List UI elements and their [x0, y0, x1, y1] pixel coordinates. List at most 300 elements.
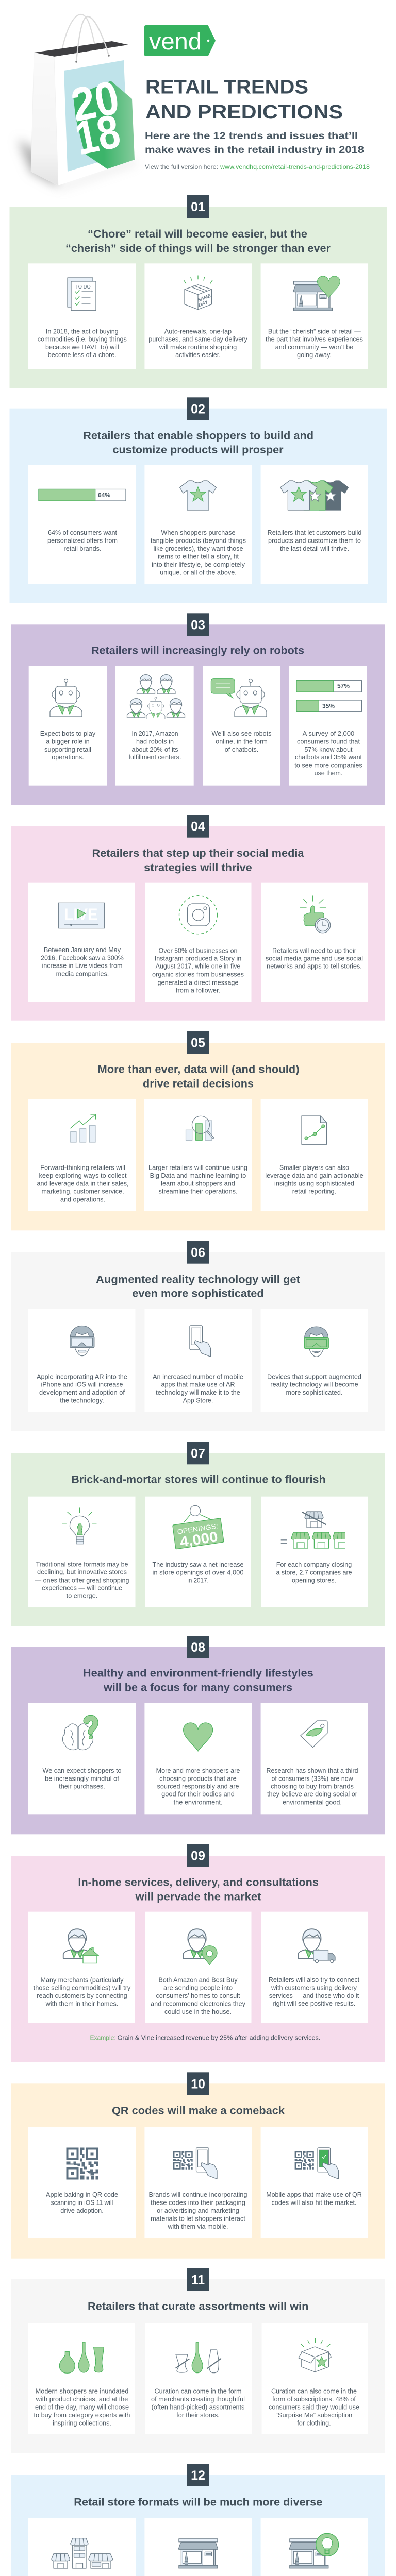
- icon: QR code with phone: [173, 2148, 217, 2179]
- text: apple QR: Apple baking in QR code: [46, 2191, 118, 2198]
- text: apple AR: development and adoption of: [39, 1389, 125, 1396]
- text: delivery: with customers using delivery: [271, 1985, 357, 1992]
- text: instagram: from a follower.: [176, 987, 220, 994]
- text: hand-picked: (often hand-picked) assortments: [152, 2403, 244, 2411]
- badge 05: [187, 1031, 209, 1054]
- text: survey: A survey of 2,000: [303, 730, 354, 737]
- icon: robot: [50, 679, 82, 717]
- text: reporting: leverage data and gain actionable: [265, 1172, 364, 1179]
- icon: live video: LIVE: [64, 905, 98, 924]
- text: mobile apps: App Store.: [183, 1397, 213, 1404]
- heading 05: [98, 1063, 299, 1090]
- section 08: [11, 1636, 385, 1834]
- text: consultations: Both Amazon and Best Buy: [159, 1977, 238, 1984]
- text: research: [266, 1767, 358, 1806]
- example: grain and vine: Example:: [90, 2034, 116, 2041]
- text: forward-thinking: and operations.: [60, 1196, 105, 1203]
- card: customize: [261, 465, 368, 584]
- card: instagram: [145, 883, 252, 1002]
- text: big data: learn about shoppers and: [161, 1180, 235, 1187]
- title: RETAIL TRENDS: [145, 76, 308, 98]
- text: cherish: going away.: [297, 351, 332, 359]
- text: amazon: had robots in: [136, 738, 174, 745]
- example: grain and vine: Grain & Vine increased revenue by 25% after adding delivery services.: [118, 2034, 320, 2041]
- text: big data: Larger retailers will continue using: [148, 1164, 248, 1171]
- text: openings: in 2017.: [187, 1577, 209, 1584]
- icon: magnified bar chart: [186, 1116, 213, 1140]
- text: facebook live: Between January and May: [44, 946, 121, 954]
- shopping bag illustration: 20: [67, 71, 123, 132]
- panel 08 background: [11, 1647, 385, 1834]
- text: brands QR: [148, 2191, 248, 2230]
- card: subscriptions: [262, 2323, 368, 2434]
- text: facebook live: 2016, Facebook saw a 300%: [41, 954, 124, 961]
- text: reporting: insights using sophisticated: [274, 1180, 354, 1187]
- card: same day: [144, 263, 252, 369]
- text: brands QR: or advertising and marketing: [157, 2207, 239, 2214]
- heading 11: Retailers that curate assortments will win: [88, 2300, 308, 2313]
- badge 05: 05: [191, 1036, 205, 1050]
- shopping bag illustration: [18, 14, 136, 189]
- text: bots: Expect bots to play: [40, 730, 96, 737]
- panel 12 background: [11, 2475, 385, 2576]
- text: reporting: retail reporting.: [292, 1188, 336, 1195]
- card: devices: [261, 1309, 368, 1412]
- text: hand-picked: Curation can come in the form: [155, 2388, 241, 2395]
- text: research: of consumers (33%) are now: [271, 1775, 353, 1782]
- panel 07 background: [11, 1453, 385, 1626]
- text: same day: purchases, and same-day delivery: [148, 336, 248, 343]
- icon: storefront: [178, 2539, 218, 2568]
- text: devices: reality technology will become: [270, 1381, 358, 1388]
- icon: instagram story: [179, 896, 218, 934]
- icon: three t-shirts: [280, 481, 349, 510]
- icon: three store buildings: [52, 2538, 112, 2568]
- text: to-do: because we HAVE to) will: [45, 344, 119, 351]
- text: instagram: [152, 947, 244, 994]
- text: cherish: [266, 328, 363, 359]
- text: forward-thinking: keep exploring ways to collect: [39, 1172, 127, 1179]
- badge 11: 11: [191, 2273, 205, 2287]
- text: research: choosing to buy from brands: [271, 1783, 354, 1790]
- text: devices: more sophisticated.: [286, 1389, 342, 1396]
- text: bots: operations.: [52, 754, 84, 761]
- card: social game: [261, 883, 368, 1002]
- heading 05: drive retail decisions: [143, 1077, 254, 1090]
- icon: chatbot with speech bubble: [211, 679, 267, 717]
- icon: QR code: [66, 2147, 98, 2179]
- text: mindful: [42, 1767, 122, 1790]
- text: in-home: those selling commodities) will try: [34, 1985, 131, 1992]
- text: to-do: commodities (i.e. buying things: [38, 336, 127, 343]
- text: openings: The industry saw a net increase: [153, 1561, 244, 1568]
- text: mindful: their purchases.: [59, 1783, 105, 1790]
- icon: to-do list: [68, 278, 96, 311]
- panel 06 background: [11, 1252, 385, 1431]
- text: apple QR: [46, 2191, 118, 2214]
- text: innovative stores: — ones that offer great shopping: [35, 1577, 129, 1584]
- text: same day: will make routine shopping: [159, 344, 237, 351]
- icon: t-shirt with star: [179, 481, 217, 510]
- text: survey: consumers found that: [297, 738, 360, 745]
- icon: report document: [302, 1116, 327, 1144]
- text: subscriptions: for clothing.: [297, 2419, 331, 2427]
- icon: closed store equals 2.7 open stores: [281, 1512, 351, 1548]
- icon: AR headset: [70, 1326, 94, 1356]
- card: responsible products: [144, 1703, 252, 1814]
- text: forward-thinking: Forward-thinking retailers will: [40, 1164, 125, 1171]
- text: survey: to see more companies: [294, 762, 362, 769]
- bar chart: 57% and 35%: 57%: [337, 683, 350, 690]
- full version link: [145, 163, 370, 171]
- heading 08: Healthy and environment-friendly lifestyles: [83, 1667, 314, 1680]
- text: hand-picked: for their stores.: [176, 2412, 220, 2419]
- badge 04: 04: [191, 820, 205, 834]
- badge 02: 02: [191, 402, 205, 416]
- text: apple QR: scanning in iOS 11 will: [51, 2199, 113, 2206]
- text: customize: products and customize them to: [268, 537, 361, 544]
- heading 09: will pervade the market: [135, 1891, 261, 1903]
- icon: person with location pin: [183, 1929, 217, 1965]
- text: consultations: consumers’ homes to consult: [156, 1992, 240, 1999]
- text: category experts: inspiring collections.: [53, 2419, 111, 2427]
- text: in-home: Many merchants (particularly: [41, 1977, 124, 1984]
- text: big data: [148, 1164, 248, 1195]
- section 02: [9, 397, 387, 603]
- icon: team with robot: [127, 675, 185, 719]
- text: tangible: items to either tell a story, fit: [158, 553, 239, 560]
- text: delivery: [269, 1976, 360, 2007]
- section 09: [11, 1844, 385, 2062]
- text: subscriptions: form of subscriptions. 48% of: [272, 2396, 356, 2403]
- badge 12: [187, 2464, 209, 2486]
- icon: openings 4,000 sign: OPENINGS:: [177, 1522, 219, 1536]
- bar chart: 57% and 35%: [296, 681, 362, 711]
- text: subscriptions: [269, 2388, 359, 2427]
- section 11: [11, 2268, 385, 2453]
- section 12: [11, 2464, 385, 2576]
- text: facebook live: media companies.: [56, 971, 109, 978]
- section 07: [11, 1442, 385, 1626]
- text: devices: Devices that support augmented: [267, 1374, 361, 1381]
- text: consultations: [151, 1977, 246, 2015]
- text: reporting: [265, 1164, 364, 1195]
- badge 01: 01: [191, 200, 205, 214]
- text: bots: supporting retail: [44, 746, 91, 753]
- text: instagram: Over 50% of businesses on: [159, 947, 238, 954]
- text: mindful: We can expect shoppers to: [42, 1767, 122, 1774]
- icon: heart: [184, 1723, 213, 1751]
- text: tangible: tangible products (beyond things: [151, 537, 246, 544]
- card: research: [261, 1703, 368, 1814]
- icon: person with house: [63, 1929, 99, 1963]
- text: research: they believe are doing social or: [267, 1791, 357, 1798]
- heading 01: “Chore” retail will become easier, but the: [88, 228, 307, 240]
- heading 01: “cherish” side of things will be stronger than ever: [65, 242, 331, 255]
- full version link: www.vendhq.com/retail-trends-and-predictions-2018: [220, 163, 370, 171]
- text: amazon: [129, 730, 182, 761]
- icon: brain with question mark: [63, 1715, 98, 1750]
- text: apple AR: the technology.: [60, 1397, 104, 1404]
- text: forward-thinking: [37, 1164, 129, 1203]
- badge 09: 09: [191, 1849, 205, 1863]
- text: mobile apps: [153, 1374, 243, 1404]
- icon: three green vases: [59, 2342, 104, 2373]
- text: responsible products: More and more shoppers are: [156, 1767, 240, 1774]
- text: big data: Big Data and machine learning to: [150, 1172, 246, 1179]
- badge 03: [187, 613, 209, 636]
- full version link: View the full version here:: [145, 163, 218, 171]
- icon: to-do list: TO DO: [75, 284, 91, 290]
- card: apple QR: [28, 2127, 136, 2238]
- icon: same-day box: SAME: [196, 293, 212, 303]
- icon: growth chart: [71, 1114, 96, 1142]
- bar chart: 64%: 64%: [98, 492, 110, 499]
- icon: same-day box: DAY: [197, 299, 210, 308]
- text: hand-picked: [151, 2388, 245, 2419]
- text: instagram: August 2017, while one in five: [156, 963, 240, 970]
- icon: person with delivery truck: [298, 1929, 335, 1963]
- badge 08: [187, 1636, 209, 1658]
- badge 10: 10: [191, 2077, 205, 2091]
- text: openings: [153, 1561, 244, 1584]
- shopping bag illustration: 18: [71, 105, 124, 165]
- vend logo: [144, 25, 216, 56]
- text: facebook live: increase in Live videos from: [42, 962, 123, 970]
- text: amazon: about 20% of its: [132, 746, 178, 753]
- text: cherish: the part that involves experiences: [266, 336, 363, 343]
- text: category experts: Modern shoppers are inundated: [36, 2388, 128, 2395]
- text: mobile QR apps: Mobile apps that make use of QR: [266, 2191, 362, 2198]
- text: forward-thinking: and leverage data in their sales,: [37, 1180, 129, 1187]
- card: experimenting: [261, 2518, 368, 2576]
- panel 01 background: [9, 207, 387, 388]
- card: mobile apps: [144, 1309, 252, 1412]
- card: in-home: [28, 1912, 135, 2023]
- text: social game: Retailers will need to up their: [272, 947, 356, 954]
- subtitle: [145, 130, 364, 156]
- text: amazon: In 2017, Amazon: [132, 730, 178, 737]
- text: survey: 57% know about: [304, 746, 353, 753]
- card: variety of formats: [28, 2518, 136, 2576]
- text: personalized: retail brands.: [64, 545, 101, 552]
- heading 04: strategies will thrive: [144, 861, 252, 874]
- panel 10 background: [11, 2083, 385, 2259]
- icon: green AR headset: [304, 1327, 328, 1357]
- text: mobile apps: apps that make use of AR: [161, 1381, 235, 1388]
- section 05: [11, 1031, 385, 1230]
- text: innovative stores: declining, but innovative stores: [37, 1569, 127, 1576]
- text: to-do: In 2018, the act of buying: [46, 328, 119, 335]
- icon: same-day box: [184, 276, 212, 310]
- badge 04: [187, 815, 209, 838]
- text: delivery: right will see positive results.: [273, 2000, 355, 2007]
- icon: openings 4,000 sign: [173, 1505, 224, 1550]
- heading 02: [83, 430, 314, 456]
- text: closing versus opening: [276, 1561, 352, 1584]
- panel 04 background: [11, 826, 385, 1021]
- text: delivery: services — and those who do it: [269, 1992, 359, 1999]
- text: tangible: When shoppers purchase: [161, 529, 236, 536]
- text: hand-picked: of merchants creating thoughtful: [151, 2396, 245, 2403]
- text: category experts: end of the day, many will choose: [35, 2403, 129, 2411]
- text: consultations: are sending people into: [163, 1985, 233, 1992]
- text: chatbots: [211, 730, 271, 753]
- text: customize: the last detail will thrive.: [280, 545, 349, 552]
- text: in-home: with them in their homes.: [45, 2001, 118, 2008]
- text: category experts: with product choices, and at the: [36, 2396, 128, 2403]
- text: innovative stores: Traditional store formats may be: [36, 1561, 128, 1568]
- icon: phone in hand: [190, 1326, 210, 1357]
- header: [18, 14, 370, 189]
- panel 11 background: [11, 2279, 385, 2453]
- icon: openings 4,000 sign: 4,000: [179, 1529, 219, 1550]
- text: responsible products: [156, 1767, 240, 1806]
- card: facebook live: [28, 883, 135, 1002]
- bar chart: 57% and 35%: 35%: [322, 702, 335, 709]
- text: personalized: 64% of consumers want: [48, 529, 118, 536]
- text: research: Research has shown that a third: [266, 1767, 358, 1774]
- text: survey: [294, 730, 362, 777]
- heading 04: [92, 847, 305, 874]
- vend logo: vend: [149, 28, 202, 55]
- text: tangible: like groceries), they want those: [154, 545, 243, 552]
- heading 09: [78, 1876, 319, 1903]
- card: closing versus opening: [261, 1497, 368, 1607]
- section 04: [11, 815, 385, 1021]
- text: tangible: [151, 529, 246, 576]
- text: category experts: [34, 2388, 130, 2427]
- heading 12: Retail store formats will be much more diverse: [74, 2496, 322, 2508]
- badge 06: [187, 1241, 209, 1264]
- text: closing versus opening: opening stores.: [292, 1577, 336, 1584]
- card: mindful: [28, 1703, 136, 1814]
- text: instagram: Instagram produced a Story in: [155, 955, 241, 962]
- heading 01: [65, 228, 331, 255]
- title: AND PREDICTIONS: [145, 101, 343, 123]
- card: reporting: [261, 1099, 368, 1211]
- badge 02: [187, 397, 209, 420]
- text: same day: activities easier.: [175, 351, 221, 359]
- text: customize: [268, 529, 361, 552]
- text: apple AR: Apple incorporating AR into the: [37, 1374, 127, 1381]
- card: openings: [145, 1497, 251, 1607]
- badge 09: [187, 1844, 209, 1867]
- text: research: environmental good.: [283, 1799, 342, 1806]
- card: innovative stores: [28, 1497, 136, 1607]
- text: mobile QR apps: codes will also hit the market.: [271, 2199, 357, 2206]
- text: responsible products: choosing products that are: [159, 1775, 237, 1782]
- icon: surprise box: [299, 2338, 331, 2372]
- heading 09: In-home services, delivery, and consultations: [78, 1876, 319, 1889]
- card: big data: [144, 1099, 252, 1211]
- badge 08: 08: [191, 1640, 205, 1655]
- text: brands QR: materials to let shoppers interact: [151, 2215, 245, 2222]
- heading 02: customize products will prosper: [112, 444, 284, 456]
- icon: live video: [58, 903, 105, 928]
- text: forward-thinking: marketing, customer service,: [41, 1188, 124, 1195]
- title: [145, 76, 343, 123]
- text: tangible: into their lifestyle, be completely: [152, 561, 245, 568]
- text: subscriptions: “Surprise Me” subscription: [276, 2412, 352, 2419]
- panel 03 background: [11, 624, 385, 805]
- heading 08: will be a focus for many consumers: [103, 1682, 292, 1694]
- text: customize: Retailers that let customers build: [268, 529, 361, 536]
- icon: light bulb with mannequin: [62, 1508, 96, 1544]
- text: consultations: and recommend electronics they: [151, 2001, 246, 2008]
- text: amazon: fulfillment centers.: [129, 754, 182, 761]
- card: category experts: [28, 2323, 135, 2434]
- icon: storefront with idea bulb: [289, 2533, 339, 2568]
- heading 08: [83, 1667, 314, 1694]
- heading 05: More than ever, data will (and should): [98, 1063, 299, 1076]
- panel 09 background: [11, 1856, 385, 2062]
- heading 07: Brick-and-mortar stores will continue to flourish: [71, 1473, 326, 1486]
- text: mobile apps: technology will make it to the: [156, 1389, 240, 1396]
- badge 07: [187, 1442, 209, 1464]
- text: brands QR: Brands will continue incorporating: [148, 2191, 248, 2198]
- heading 06: Augmented reality technology will get: [96, 1273, 300, 1285]
- text: innovative stores: experiences — will continue: [42, 1585, 122, 1592]
- text: brands QR: with them via mobile.: [167, 2223, 228, 2230]
- badge 06: 06: [191, 1246, 205, 1260]
- section 01: [9, 195, 387, 388]
- text: category experts: to buy from category experts with: [34, 2412, 130, 2419]
- text: apple QR: drive adoption.: [60, 2207, 104, 2214]
- icon: QR code with scanning phone: [295, 2148, 338, 2179]
- text: responsible products: sourced responsibly and are: [157, 1783, 239, 1790]
- text: openings: in store openings of over 4,000: [153, 1569, 244, 1576]
- heading 06: even more sophisticated: [132, 1287, 264, 1300]
- text: devices: [267, 1374, 361, 1396]
- text: big data: streamline their operations.: [159, 1188, 237, 1195]
- section 10: [11, 2072, 385, 2259]
- text: closing versus opening: For each company closing: [276, 1561, 352, 1568]
- text: to-do: [38, 328, 127, 359]
- card: chatbots: [203, 666, 280, 786]
- text: chatbots: online, in the form: [216, 738, 268, 745]
- card: to-do: [28, 263, 136, 369]
- section 06: [11, 1241, 385, 1431]
- text: closing versus opening: a store, 2.7 companies are: [276, 1569, 352, 1576]
- heading 10: QR codes will make a comeback: [112, 2104, 285, 2116]
- card: cherish: [261, 263, 368, 369]
- text: consultations: could use in the house.: [164, 2008, 232, 2015]
- text: responsible products: the environment.: [174, 1799, 222, 1806]
- card: tangible: [144, 465, 252, 584]
- text: chatbots: of chatbots.: [225, 746, 258, 753]
- text: brands QR: these codes into their packaging: [151, 2199, 245, 2206]
- heading 02: Retailers that enable shoppers to build and: [83, 430, 314, 442]
- badge 12: 12: [191, 2468, 205, 2483]
- card: consultations: [145, 1912, 252, 2023]
- text: innovative stores: [35, 1561, 129, 1600]
- icon: store with heart: [293, 276, 340, 311]
- badge 07: 07: [191, 1446, 205, 1461]
- panel 02 background: [9, 409, 387, 603]
- text: apple AR: iPhone and iOS will increase: [41, 1381, 123, 1388]
- icon: eco price tag: [301, 1721, 327, 1748]
- text: mobile QR apps: [266, 2191, 362, 2206]
- text: social game: networks and apps to tell stories.: [267, 963, 362, 970]
- text: subscriptions: Curation can also come in the: [271, 2388, 357, 2395]
- card: bots: [29, 666, 107, 786]
- badge 11: [187, 2268, 209, 2291]
- text: same day: Auto-renewals, one-tap: [164, 328, 232, 335]
- text: bots: [40, 730, 96, 761]
- badge 03: 03: [191, 618, 205, 632]
- icon: thumbs up with clock: [300, 896, 331, 933]
